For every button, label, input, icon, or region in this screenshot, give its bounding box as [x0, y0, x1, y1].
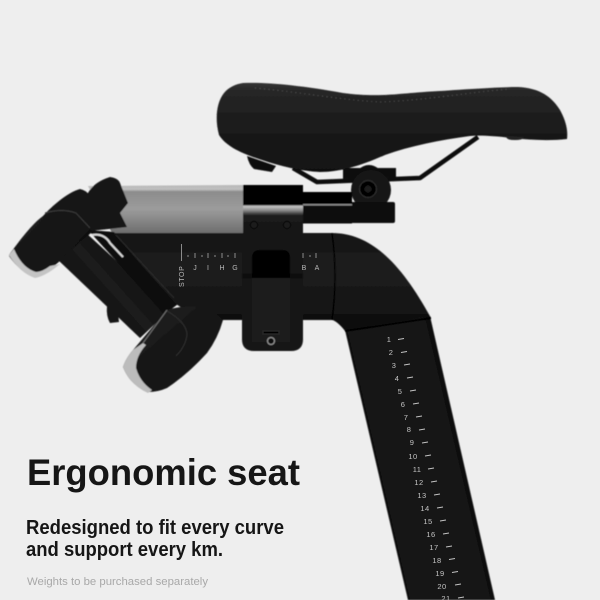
post scale: numbers 1 to 21: 3: [392, 361, 396, 370]
subtitle: and support every km.: [26, 539, 223, 561]
post scale: numbers 1 to 21: [387, 335, 464, 600]
post scale: numbers 1 to 21: 19: [435, 569, 445, 578]
title: Ergonomic seat: [27, 451, 300, 493]
post scale: numbers 1 to 21: 20: [437, 582, 447, 591]
post scale: numbers 1 to 21: 12: [414, 478, 424, 487]
main horizontal tube and elbow: [113, 233, 431, 331]
glass rim of upper cap: [9, 249, 60, 278]
rear foot under grip: [107, 306, 119, 323]
lower weight cap: [123, 306, 223, 393]
post scale: numbers 1 to 21: 4: [395, 374, 399, 383]
subtitle: [26, 517, 284, 561]
tube scale: letters A to J and STOP: [179, 244, 320, 287]
post scale: numbers 1 to 21: 1: [387, 335, 391, 344]
grip to tube shadow gap: [88, 230, 178, 314]
tube scale: letters A to J and STOP: H: [219, 265, 225, 272]
post scale: numbers 1 to 21: 5: [398, 387, 402, 396]
post scale: numbers 1 to 21: 18: [432, 556, 442, 565]
post scale: numbers 1 to 21: 15: [423, 517, 433, 526]
latch screw: [268, 338, 274, 344]
post scale: numbers 1 to 21: 8: [407, 425, 411, 434]
post scale: numbers 1 to 21: 6: [401, 400, 405, 409]
seat slider arms: [302, 192, 352, 224]
post scale: numbers 1 to 21: 11: [413, 465, 421, 474]
stop label: STOP: [179, 266, 186, 287]
post scale: numbers 1 to 21: 7: [404, 413, 408, 422]
post scale: numbers 1 to 21: 10: [408, 452, 418, 461]
tube scale: letters A to J and STOP: G: [232, 265, 238, 272]
upper weight cap: [9, 177, 128, 278]
subtitle: Redesigned to fit every curve: [26, 517, 284, 539]
footnote: Weights to be purchased separately: [27, 576, 209, 588]
post scale: numbers 1 to 21: 13: [417, 491, 427, 500]
elbow seam: [332, 233, 335, 320]
tube scale: letters A to J and STOP: B: [302, 265, 307, 272]
saddle underside bumper: [506, 136, 524, 140]
tube scale: letters A to J and STOP: A: [315, 265, 320, 272]
latch strap: [252, 250, 290, 342]
tube scale: letters A to J and STOP: I: [207, 265, 209, 272]
saddle perforation texture: [255, 88, 510, 102]
post scale: numbers 1 to 21: 9: [410, 438, 414, 447]
saddle: [217, 83, 567, 172]
post scale: numbers 1 to 21: 17: [429, 543, 439, 552]
post scale: numbers 1 to 21: 16: [426, 530, 436, 539]
glass rim of lower cap: [123, 343, 152, 393]
clamp band with bolts: [243, 185, 303, 234]
seat post: [345, 316, 495, 600]
seat rails and clamp: [247, 137, 478, 223]
handle grip: [56, 232, 170, 338]
transparent tube: [88, 185, 243, 233]
post scale: numbers 1 to 21: 14: [420, 504, 430, 513]
tube scale: letters A to J and STOP: J: [193, 265, 197, 272]
lower bracket: [242, 233, 303, 351]
post scale: numbers 1 to 21: 2: [389, 348, 393, 357]
chrome highlight on the grip: [92, 235, 123, 257]
